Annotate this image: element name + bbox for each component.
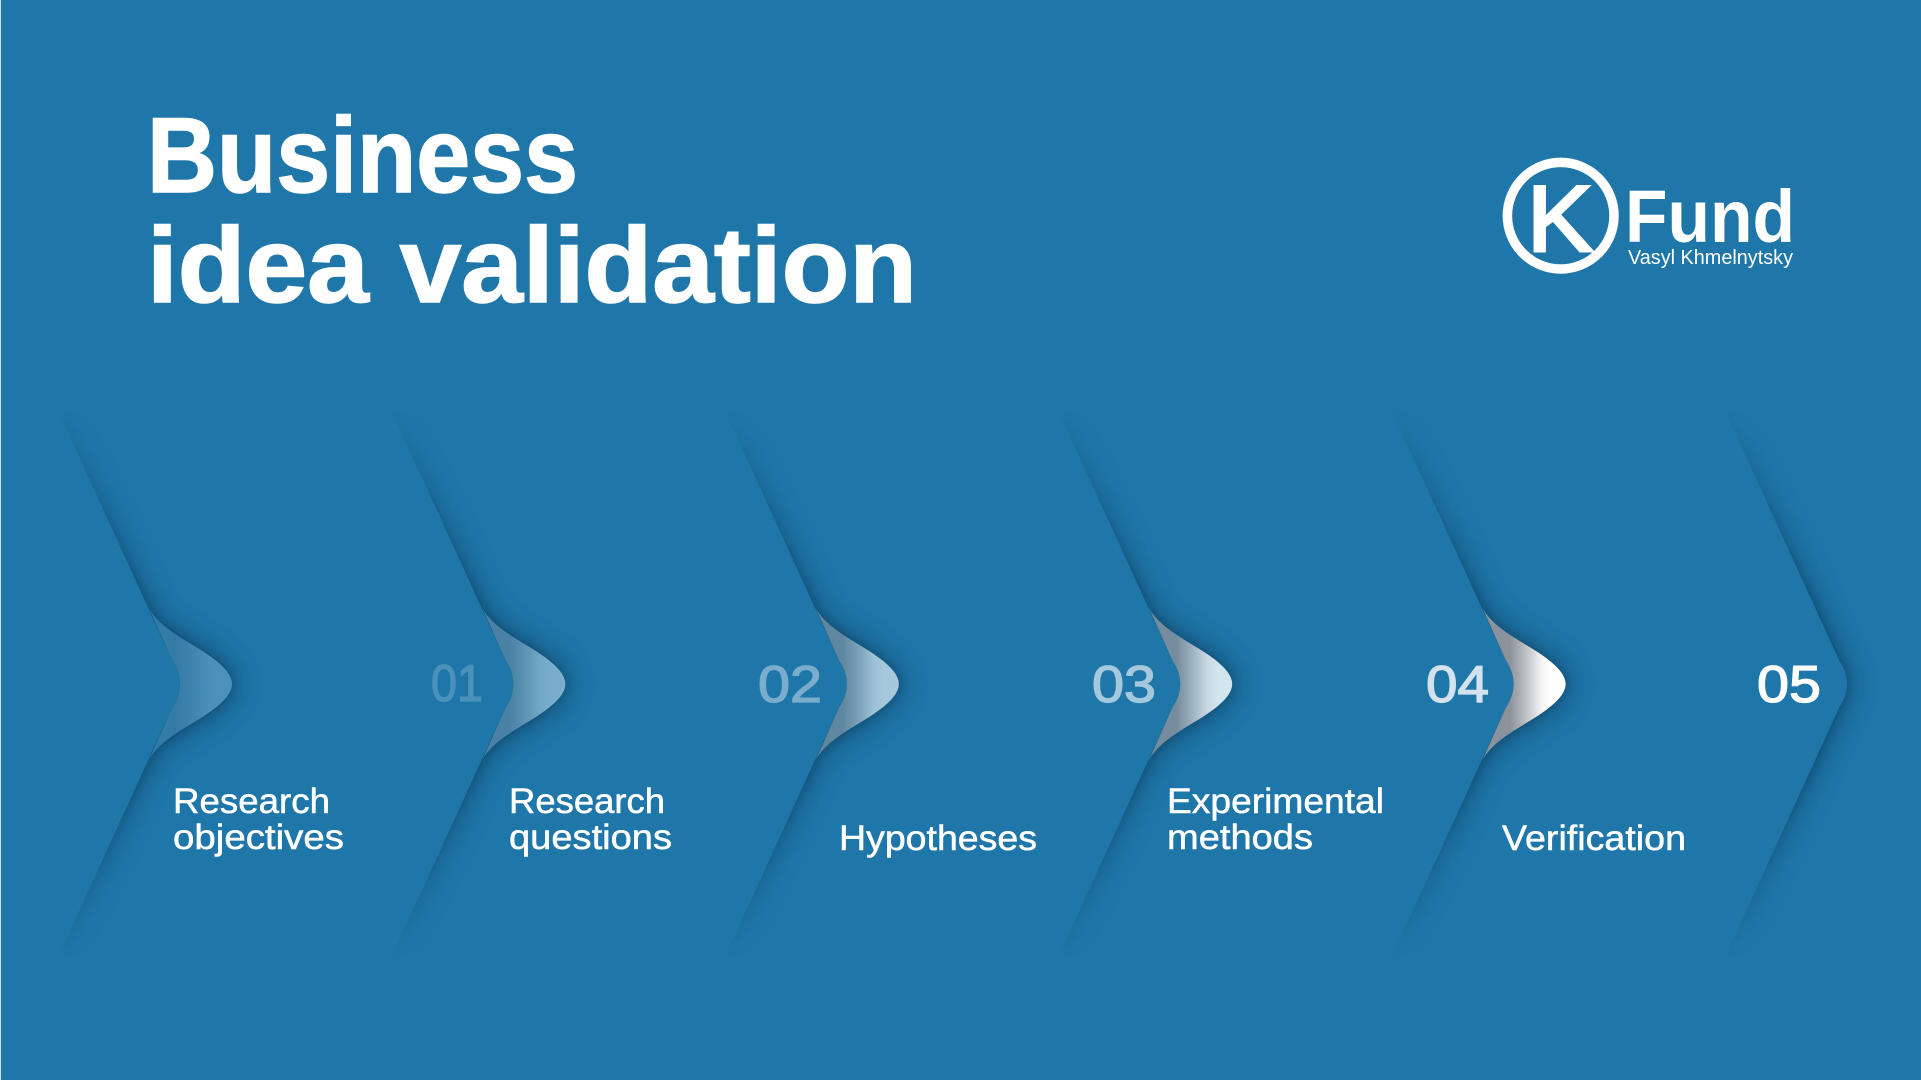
chevron 2 with curl [408,446,578,920]
shadow 2 [408,446,578,920]
label: Research questions [509,782,672,857]
chevron 3 with curl [742,448,910,921]
logo ring with K [1507,162,1614,271]
logo: KFund [1507,162,1795,271]
number 05: 05 [1757,656,1821,714]
label: Experimental methods [1167,782,1384,857]
shadow 5 [1408,447,1578,922]
shadow 4 [1074,447,1244,922]
shadow 3 [742,448,910,921]
curl 1 [148,606,232,762]
label: Hypotheses: Hypotheses [839,819,1037,858]
chevron 5 with curl [1408,447,1578,922]
label: Research objectives: Research [173,782,330,821]
number 02: 02 [758,656,822,714]
title: idea validation [147,205,917,325]
title [147,95,917,325]
label: Experimental methods: methods [1167,818,1313,857]
chevron 4 with curl [1074,447,1244,922]
shadow 1 [74,447,244,922]
label: Research questions: Research [509,782,665,821]
curl 5 [1482,606,1566,762]
chevron 6 end shadow [1742,446,1860,922]
number 04: 04 [1426,656,1489,714]
number 03: 03 [1092,656,1156,714]
label: Research objectives [173,782,344,857]
number 01: 01 [431,655,483,713]
curl 4 [1148,606,1232,762]
logo wordmark: Fund [1625,175,1795,258]
chevron 1 with curl [74,447,244,922]
curl 3 [815,606,899,762]
curl 2 [481,606,565,762]
label: Research questions: questions [509,818,672,857]
label: Research objectives: objectives [173,818,344,857]
logo ring with K: K [1527,166,1593,271]
logo subtitle: Vasyl Khmelnytsky [1628,247,1793,269]
title: Business [147,95,578,215]
label: Experimental methods: Experimental [1167,782,1384,821]
label: Verification: Verification [1502,819,1686,858]
